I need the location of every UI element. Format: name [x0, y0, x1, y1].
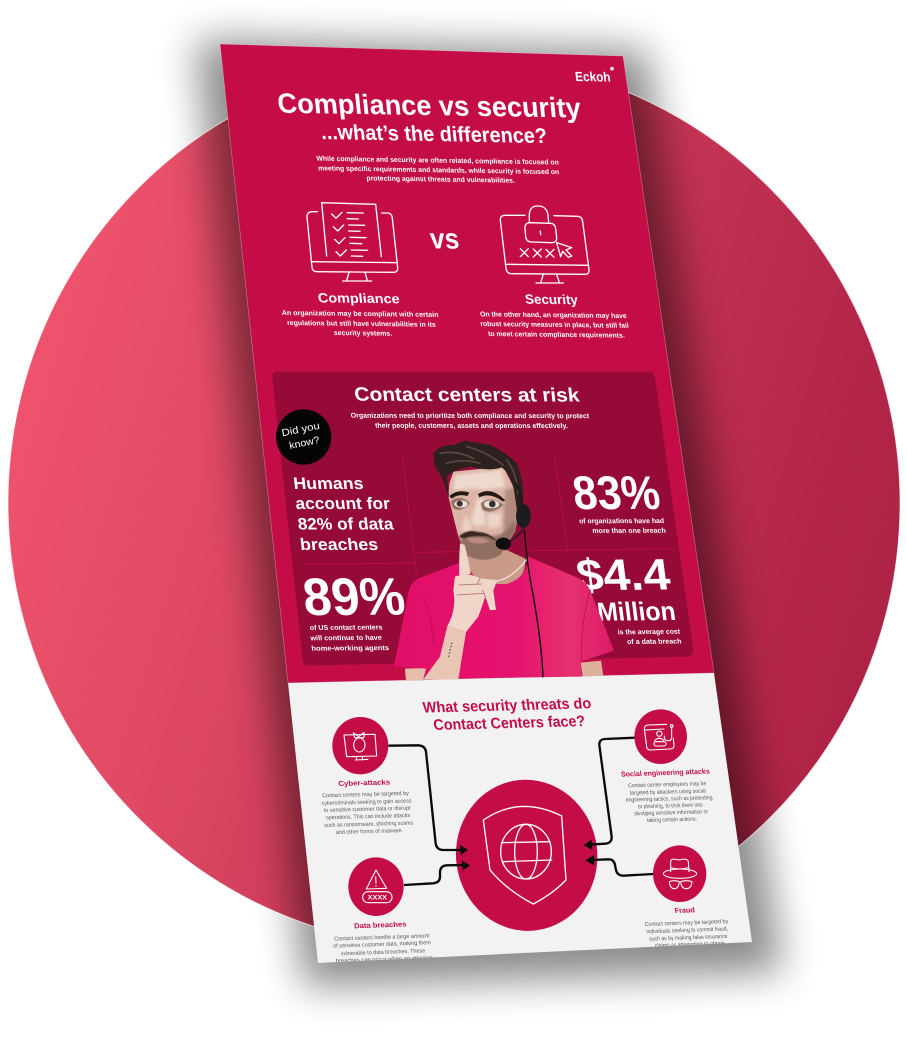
threat: social engineering attacks: engineering tactics, such as pretexting	[625, 795, 713, 804]
stat: humans account for 82%	[292, 474, 395, 554]
threat: social engineering attacks: taking certain actions.	[647, 817, 698, 824]
threat: data breaches: Data breaches	[354, 920, 407, 930]
badge: did you know: know?	[288, 435, 321, 452]
stat: humans account for 82%: 82% of data	[297, 514, 395, 533]
panel grid lines	[303, 454, 673, 577]
face	[448, 467, 517, 560]
pointing hand	[447, 543, 497, 632]
icon: data breach warning: XXXX	[368, 895, 387, 901]
stat: humans account for 82%: account for	[294, 494, 391, 513]
panel heading: Organizations need to prioritize both compliance and security to protect	[350, 413, 590, 420]
hair texture	[440, 447, 518, 493]
threat: fraud: such as by making false insurance	[649, 934, 728, 943]
threat: social engineering attacks: targeted by attackers using social	[629, 789, 706, 797]
stat: 89%: of US contact centers	[309, 624, 383, 632]
hair	[433, 441, 523, 508]
person with headset	[394, 441, 614, 681]
stat: 89%: home-working agents	[311, 645, 390, 653]
stat: 83%: of organizations have had	[579, 518, 665, 525]
threat: fraud: claims or attempting to obtain	[654, 941, 725, 949]
lips	[467, 537, 490, 544]
stat: $4.4 million	[573, 551, 682, 646]
stat: 89%: 89%	[300, 568, 408, 627]
stat: $4.4 million: is the average cost	[617, 629, 681, 636]
threat: data breaches	[333, 920, 433, 965]
icon: security lock monitor	[500, 206, 589, 283]
neck	[464, 550, 525, 585]
stat: humans account for 82%: Humans	[292, 474, 364, 493]
panel heading	[350, 384, 590, 430]
threat: cyber-attacks: and other forms of malware.	[336, 828, 404, 836]
right side shade	[503, 487, 518, 537]
face shading	[453, 470, 518, 562]
title: ...what’s the difference?	[320, 120, 548, 148]
intro paragraph	[316, 156, 560, 185]
compliance text block	[281, 290, 439, 338]
stat: $4.4 million: of a data breach	[627, 638, 682, 646]
panel heading: their people, customers, assets and operations effectively.	[375, 423, 568, 430]
sheet shadow	[196, 40, 782, 986]
stat: 83%: 83%	[570, 467, 663, 520]
security text block	[480, 292, 629, 340]
threat: social engineering attacks: Social engineering attacks	[620, 767, 710, 779]
beard stubble	[459, 520, 516, 562]
stat: 83%: more than one breach	[592, 528, 666, 535]
icon: bomb on monitor	[332, 717, 388, 774]
eye sockets	[451, 498, 503, 512]
intro paragraph: meeting specific requirements and standards, while security is focused on	[318, 165, 560, 176]
threat: data breaches: breaches can occur when an attacker	[336, 955, 433, 965]
threat: cyber-attacks: such as ransomware, phishing scams	[324, 821, 414, 829]
compliance text block: An organization may be compliant with certain	[281, 310, 439, 319]
nose	[471, 498, 486, 526]
eyebrows	[449, 491, 505, 501]
clipped text at sheet bottom	[333, 905, 729, 965]
stat: humans account for 82%: breaches	[299, 535, 379, 554]
forearm	[423, 626, 466, 679]
stat: $4.4 million: Million	[595, 596, 677, 627]
threat: cyber-attacks: operations. This can include attacks	[326, 813, 411, 821]
threat: fraud	[645, 907, 728, 947]
icon: data breach warning	[348, 857, 404, 916]
cheek highlight	[462, 513, 502, 532]
shirt seams	[423, 590, 590, 662]
threat: social engineering attacks	[620, 709, 713, 824]
infographic sheet	[220, 44, 752, 965]
left arm skin	[405, 668, 427, 681]
central circle with shield and globe	[447, 772, 606, 939]
threat: data breaches: of sensitive customer data, making them	[333, 940, 431, 950]
sheet: light lower section	[288, 673, 752, 963]
compliance text block: Compliance	[317, 290, 400, 306]
mustache	[458, 531, 497, 541]
intro paragraph: While compliance and security are often related, compliance is focused on	[316, 156, 559, 167]
forearm tattoo	[448, 643, 452, 659]
threat: social engineering attacks: or phishing, to trick them into	[637, 803, 703, 810]
right arm skin	[581, 661, 603, 677]
security text block: to meet certain compliance requirements.	[488, 331, 625, 340]
forehead highlight	[453, 470, 505, 490]
section heading: Contact Centers face?	[432, 713, 586, 734]
threat: cyber-attacks: Contact centers may be targeted by	[322, 791, 409, 799]
icon: phishing hook on browser	[634, 709, 687, 764]
stat: 89%	[300, 568, 408, 653]
stat: $4.4 million: $4.4	[573, 551, 673, 600]
threat: fraud: individuals seeking to commit fraud,	[646, 926, 729, 935]
section heading	[422, 695, 592, 734]
threat: social engineering attacks: Contact center employees may be	[628, 781, 707, 789]
threat: data breaches: Contact centers handle a large amount	[334, 933, 430, 943]
panel heading: Contact centers at risk	[353, 384, 581, 407]
threat: cyber-attacks: to sensitive customer data or disrupt	[324, 806, 411, 814]
threat: cyber-attacks: Cyber-attacks	[338, 777, 391, 788]
compliance text block: regulations but still have vulnerabilities in its	[287, 320, 436, 329]
threat: social engineering attacks: divulging sensitive information or	[634, 809, 709, 817]
intro paragraph: protecting against threats and vulnerabilities.	[366, 175, 515, 185]
badge: did you know	[276, 409, 331, 465]
security text block: robust security measures in place, but still fail	[480, 321, 629, 330]
security text block: On the other hand, an organization may have	[480, 311, 627, 320]
threat: cyber-attacks: cybercriminals seeking to gain access	[321, 798, 412, 807]
threat: cyber-attacks	[321, 717, 414, 836]
arrows to central shield	[388, 738, 653, 885]
threat: fraud: Contact centers may be targeted by	[644, 919, 729, 928]
logo: Eckoh: Eckoh	[574, 69, 611, 85]
headset	[496, 483, 543, 677]
sheet: red upper section	[220, 44, 714, 683]
panel background	[272, 372, 693, 666]
collar	[478, 559, 527, 582]
section: security threats	[321, 695, 713, 939]
eyes	[454, 500, 499, 508]
panel: contact centers at risk	[272, 372, 693, 666]
threat: data breaches: vulnerable to data breaches. These	[341, 948, 426, 957]
section heading: What security threats do	[422, 695, 592, 717]
security text block: Security	[524, 292, 579, 307]
title: Compliance vs security	[276, 88, 583, 124]
stat: 89%: will continue to have	[309, 635, 382, 642]
title	[276, 88, 583, 148]
badge: did you know: Did you	[281, 421, 321, 439]
compliance text block: security systems.	[333, 330, 393, 338]
t-shirt	[394, 557, 614, 679]
label: vs: vs	[429, 223, 461, 256]
icon: fraud hat and glasses	[653, 845, 706, 902]
icon: compliance checklist monitor	[307, 203, 398, 281]
header section	[276, 67, 629, 340]
threat: fraud: Fraud	[674, 905, 696, 915]
